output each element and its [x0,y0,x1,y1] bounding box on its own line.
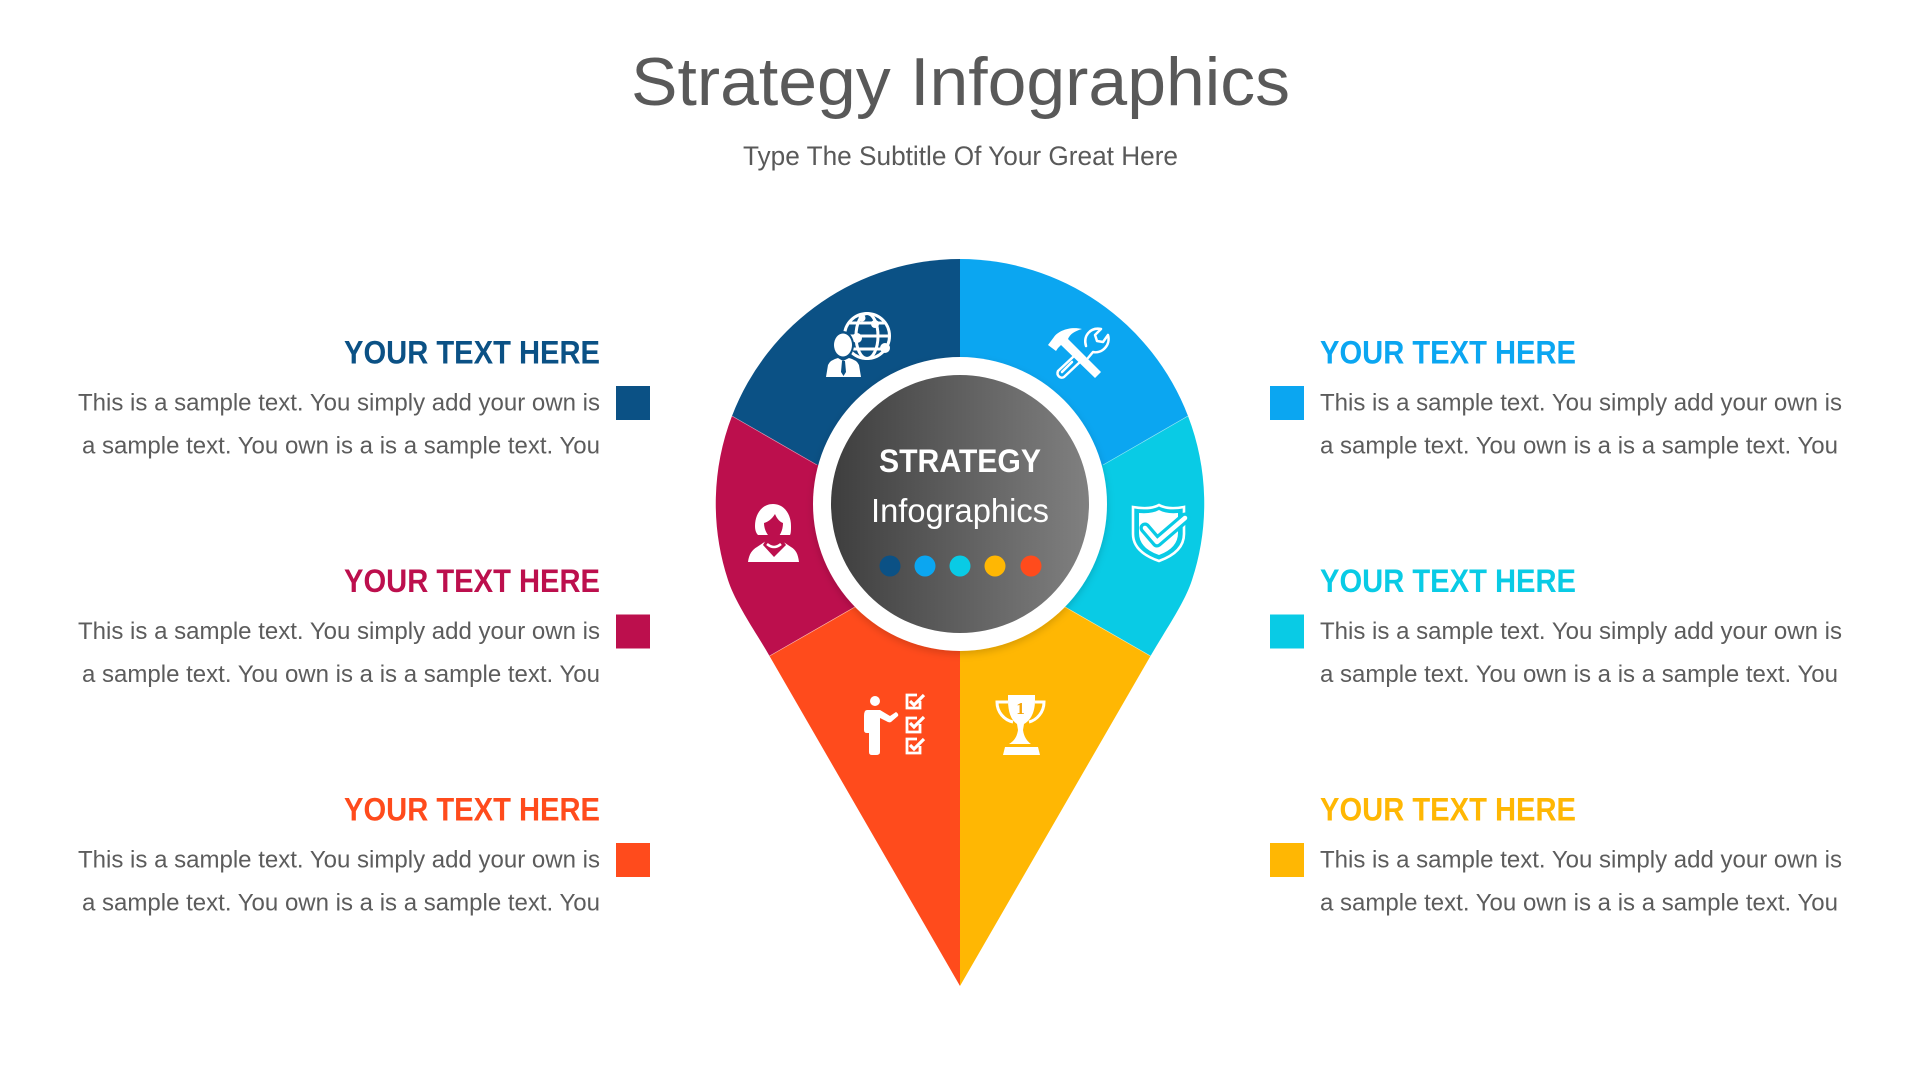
text block: left 2: YOUR TEXT HERE [344,563,600,599]
icon: hammer and wrench [1048,328,1109,378]
marker: right 2 [1270,614,1304,648]
text block: left 2 [78,563,600,688]
text block: right 1: YOUR TEXT HERE [1320,334,1576,370]
centre disc [831,375,1089,633]
text block: left 1: This is a sample text. You simply add your own is [78,390,600,416]
marker: right 3 [1270,843,1304,877]
text block: right 3 [1320,792,1842,916]
text block: right 3: This is a sample text. You simply add your own is [1320,846,1842,874]
text block: right 1 [1320,334,1842,460]
title: Strategy Infographics [631,44,1290,120]
map pin diagram [716,259,1204,986]
marker: right 1 [1270,386,1304,420]
text block: right 3: YOUR TEXT HERE [1320,792,1576,828]
text block: left 1: YOUR TEXT HERE [344,334,600,370]
segment: cyan [960,416,1204,656]
icon: trophy [997,695,1044,755]
segment: crimson [716,416,960,656]
centre label: strategy: STRATEGY [879,443,1041,479]
white ring [813,357,1107,651]
text block: right 2: a sample text. You own is a is a sample text. You [1320,661,1838,688]
text block: left 2: This is a sample text. You simply add your own is [78,618,600,645]
icon: shield check [1133,505,1185,561]
icon: presenter with checklist [864,695,924,755]
segment: blue [960,259,1188,548]
text block: right 1: This is a sample text. You simply add your own is [1320,390,1842,416]
segment: yellow [960,546,1150,986]
text block: right 2: YOUR TEXT HERE [1320,563,1576,599]
text block: left 3: YOUR TEXT HERE [344,792,600,828]
text block: left 2: a sample text. You own is a is a sample text. You [82,661,600,688]
text block: left 3: This is a sample text. You simply add your own is [78,846,600,874]
text block: right 1: a sample text. You own is a is a sample text. You [1320,432,1838,460]
text block: left 3 [78,792,600,916]
text block: right 2: This is a sample text. You simply add your own is [1320,618,1842,645]
segment: navy [732,259,960,548]
text block: right 3: a sample text. You own is a is a sample text. You [1320,890,1838,916]
marker: left 1 [616,386,650,420]
marker: left 2 [616,614,650,648]
text block: left 1: a sample text. You own is a is a sample text. You [82,432,600,460]
centre label: infographics: Infographics [871,492,1049,529]
icon: woman [748,504,799,562]
subtitle: Type The Subtitle Of Your Great Here [743,141,1178,171]
segment: orange [770,546,960,986]
text block: left 1 [78,334,600,460]
colour dots [880,556,1042,576]
marker: left 3 [616,843,650,877]
icon: trophy: 1 [1016,699,1025,718]
text block: left 3: a sample text. You own is a is a sample text. You [82,890,600,916]
text block: right 2 [1320,563,1842,688]
icon: globe person [823,314,890,379]
